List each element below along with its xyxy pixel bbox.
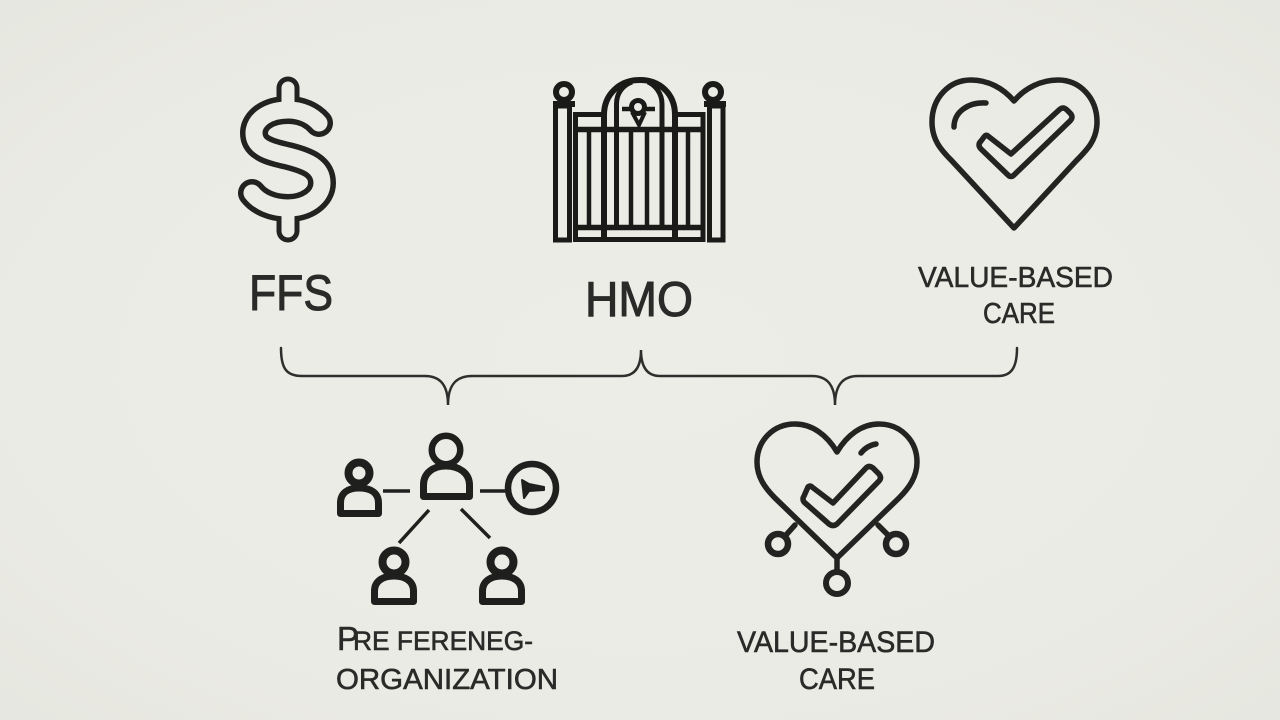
label: HMO: HMO (585, 273, 693, 327)
label: value-based care (bottom): CARE (799, 663, 875, 696)
icon: provider network (340, 436, 556, 602)
label: FFS: FFS (249, 265, 333, 321)
brackets (281, 348, 1017, 405)
label: value-based care (bottom): VALUE-BASED (737, 626, 935, 659)
icon: dollar sign (252, 88, 322, 231)
label: pre fereneg organization: RE FERENEG- (353, 626, 533, 656)
label: value-based care (top) (918, 262, 1113, 330)
icon: gate (553, 80, 726, 240)
label: value-based care (top): VALUE-BASED (918, 262, 1113, 294)
label: pre fereneg organization (336, 620, 558, 696)
icon: heart with check and nodes (757, 424, 917, 594)
label: pre fereneg organization: P (337, 620, 359, 657)
label: value-based care (top): CARE (983, 298, 1055, 330)
icon: heart with check (932, 80, 1097, 228)
label: pre fereneg organization: ORGANIZATION (336, 664, 558, 696)
label: value-based care (bottom) (737, 626, 935, 696)
